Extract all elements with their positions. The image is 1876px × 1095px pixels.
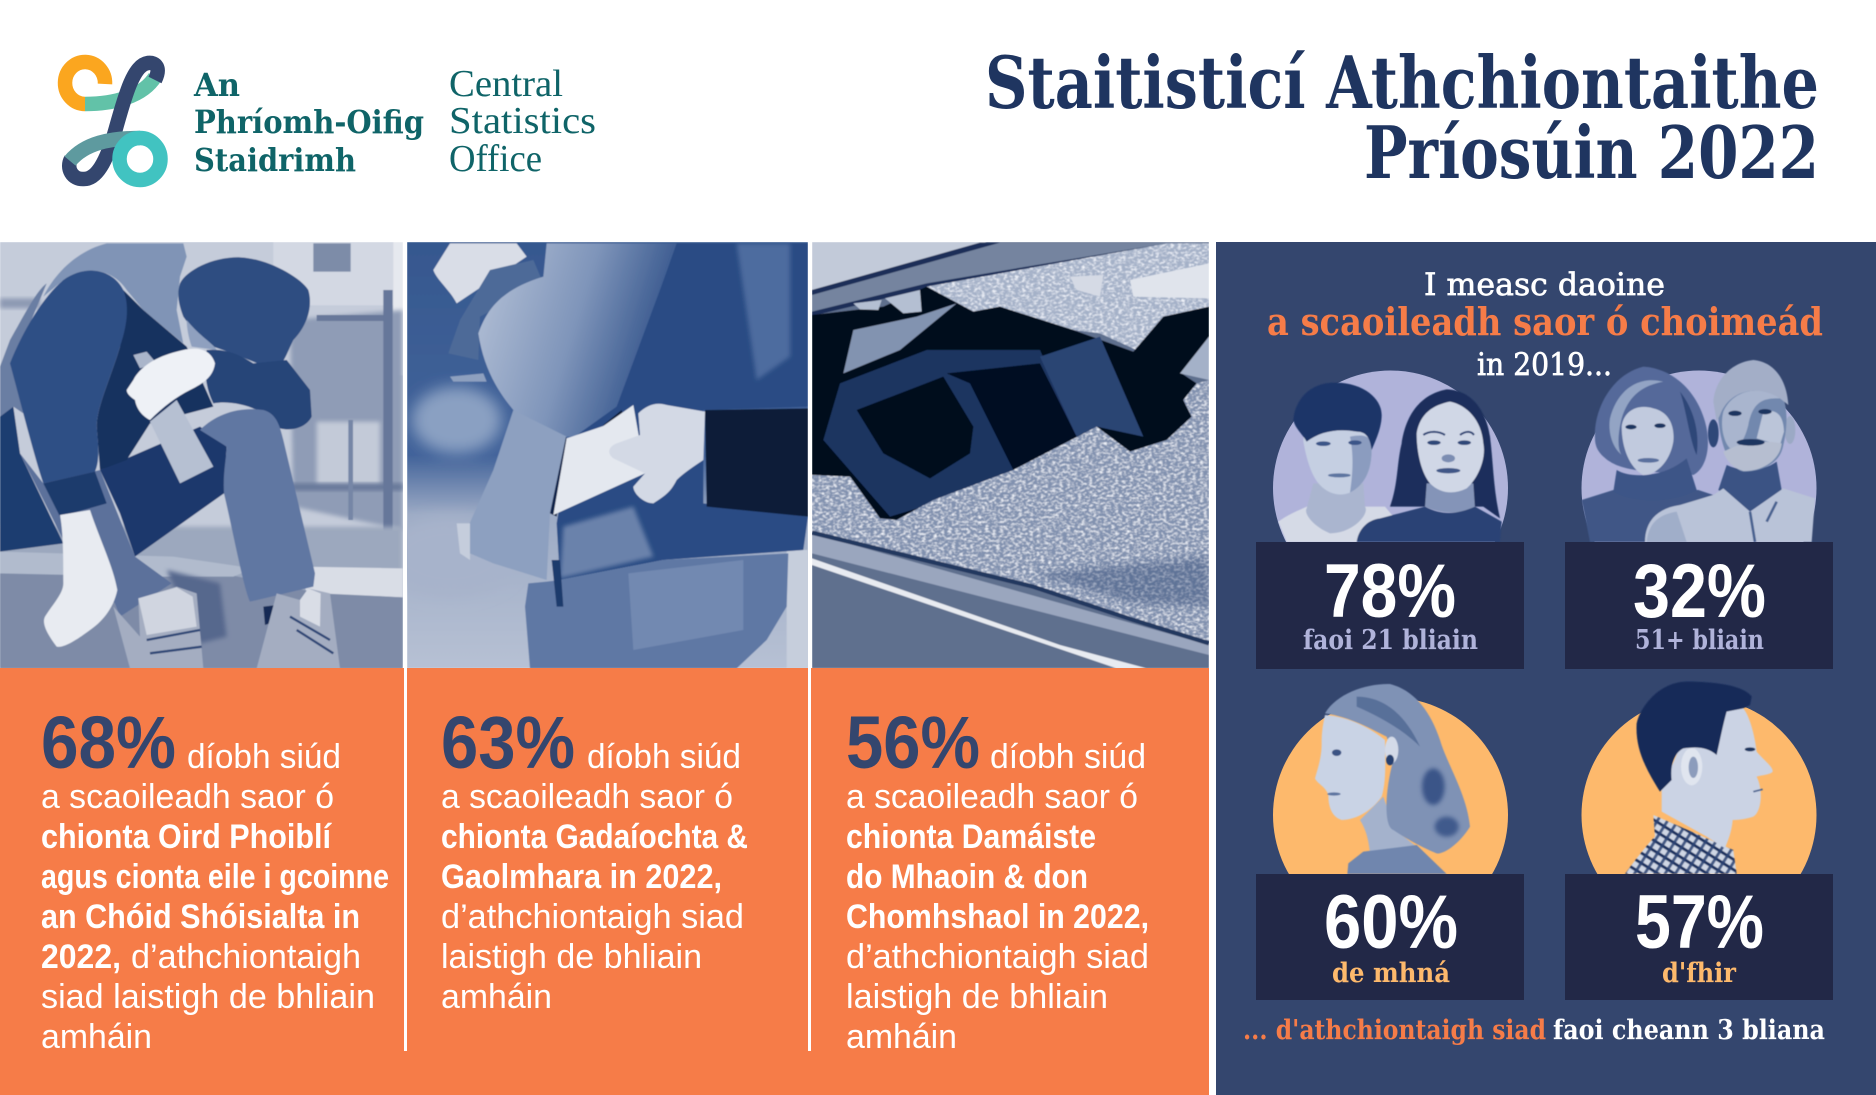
text block: damage offences: díobh siúd [990, 738, 1146, 776]
heading: in 2019... [1477, 347, 1612, 383]
logo text: Irish name [193, 66, 424, 179]
text block: public order offences [41, 701, 389, 1056]
logo text: Irish name: Phríomh-Oifig [194, 103, 424, 141]
panel: released from custody [1216, 242, 1876, 1095]
stat box: 60% women: 60% [1324, 880, 1458, 965]
stat box: 60% women [1256, 874, 1524, 1000]
footer note [1243, 1015, 1825, 1046]
stat box: 32% aged 51+: 32% [1633, 549, 1766, 634]
text block: public order offences: 68% [41, 701, 176, 784]
text block: theft offences: amháin [441, 978, 552, 1016]
logo: Central Statistics Office [65, 62, 596, 180]
portrait: woman profile [1273, 684, 1508, 932]
text block: theft offences [441, 701, 748, 1016]
text block: damage offences: a scaoileadh saor ó [846, 778, 1138, 816]
text block: damage offences: 56% [846, 701, 980, 784]
text block: public order offences: an Chóid Shóisialta in [41, 898, 360, 936]
text block: theft offences: laistigh de bhliain [441, 938, 702, 976]
photo: pickpocket and phone [383, 242, 810, 668]
text block: public order offences: agus cionta eile i gcoinne [41, 858, 389, 896]
text block: theft offences: d’athchiontaigh siad [441, 898, 744, 936]
logo text: English name: Office [449, 138, 542, 180]
text block: theft offences: díobh siúd [587, 738, 741, 776]
text block: public order offences: díobh siúd [187, 738, 341, 776]
text block: theft offences: a scaoileadh saor ó [441, 778, 733, 816]
stat box: 60% women: de mhná [1332, 958, 1450, 989]
text block: damage offences: laistigh de bhliain [846, 978, 1108, 1016]
text block: damage offences: chionta Damáiste [846, 818, 1096, 856]
text block: theft offences: 63% [441, 701, 575, 784]
dividers [404, 668, 407, 1051]
heading: I measc daoine [1424, 267, 1665, 303]
text block: public order offences: chionta Oird Phoiblí [41, 818, 332, 856]
portrait: under 21 [1273, 370, 1508, 606]
logo text: Irish name: Staidrimh [194, 141, 356, 179]
logo text: English name [449, 63, 596, 180]
portrait: 51 plus [1582, 360, 1816, 606]
logo text: Irish name: An [193, 66, 240, 104]
photo: smashed car window [812, 242, 1209, 668]
stat box: 57% men: 57% [1635, 880, 1764, 965]
text block: public order offences: 2022, [41, 938, 121, 976]
logo text: English name: Central [449, 63, 563, 105]
text block: public order offences: amháin [41, 1018, 152, 1056]
title [985, 40, 1819, 195]
text block: damage offences: Chomhshaol in 2022, [846, 898, 1149, 936]
photo: hooded person with bottle [0, 242, 403, 668]
icon: CSO knot [65, 62, 160, 180]
footer note: ... d'athchiontaigh siad [1243, 1015, 1546, 1046]
text block: theft offences: Gaolmhara in 2022, [441, 858, 722, 896]
stat box: 57% men [1565, 874, 1833, 1000]
panel: orange statistics band [0, 668, 1209, 1095]
heading [1267, 267, 1823, 383]
stat box: 32% aged 51+ [1565, 542, 1833, 669]
text block: public order offences: a scaoileadh saor ó [41, 778, 334, 816]
text block: public order offences: d’athchiontaigh [131, 938, 361, 976]
stat box: 78% under 21: 78% [1324, 549, 1456, 634]
stat box: 78% under 21: faoi 21 bliain [1303, 625, 1478, 656]
stat box: 32% aged 51+: 51+ bliain [1635, 625, 1764, 656]
text block: theft offences: chionta Gadaíochta & [441, 818, 748, 856]
logo text: English name: Statistics [449, 100, 596, 142]
text block: damage offences: d’athchiontaigh siad [846, 938, 1149, 976]
text block: public order offences: siad laistigh de bhliain [41, 978, 375, 1016]
text block: damage offences: amháin [846, 1018, 957, 1056]
portrait: man profile [1582, 682, 1816, 932]
heading: a scaoileadh saor ó choimeád [1267, 299, 1823, 344]
text block: damage offences [846, 701, 1149, 1056]
text block: damage offences: do Mhaoin & don [846, 858, 1088, 896]
stat box: 78% under 21 [1256, 542, 1524, 669]
stat box: 57% men: d'fhir [1662, 958, 1737, 989]
footer note: faoi cheann 3 bliana [1553, 1015, 1825, 1046]
